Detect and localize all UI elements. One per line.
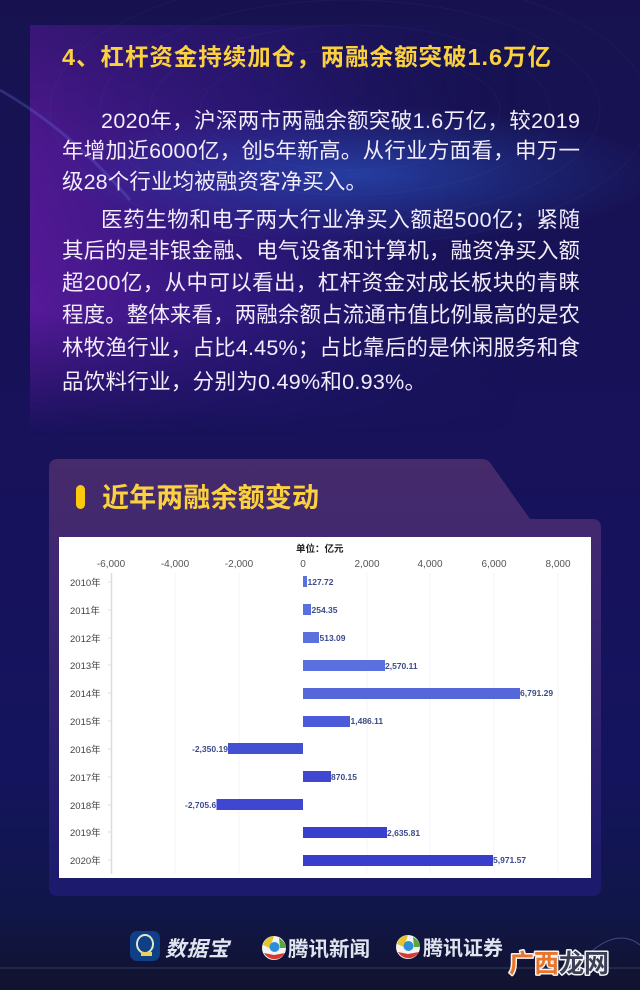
watermark: 广西 xyxy=(509,950,559,978)
y axis labels: 2010年 xyxy=(70,577,101,589)
chart unit: 单位：亿元 xyxy=(296,543,344,555)
y axis labels: 2020年 xyxy=(70,855,101,867)
panel background tab xyxy=(49,459,601,896)
text block: paragraph two: 林牧渔行业，占比4.45%；占比靠后的是休闲服务和食 xyxy=(62,336,580,360)
logo: 数据宝: 数据宝 xyxy=(165,937,232,961)
data labels: 2,635.81 xyxy=(387,828,420,838)
y axis labels: 2012年 xyxy=(70,633,101,645)
panel: chart section xyxy=(49,459,601,896)
x axis labels xyxy=(97,559,571,570)
data labels: -2,705.6 xyxy=(185,800,216,810)
x axis labels: 6,000 xyxy=(481,559,507,570)
y axis labels: 2018年 xyxy=(70,800,101,812)
chart heading: 近年两融余额变动 xyxy=(102,483,319,513)
data labels: 870.15 xyxy=(331,772,357,782)
x axis labels: 0 xyxy=(300,559,306,570)
y axis labels: 2016年 xyxy=(70,744,101,756)
text block: paragraph two: 程度。整体来看，两融余额占流通市值比例最高的是农 xyxy=(62,303,580,327)
x axis labels: 8,000 xyxy=(545,559,571,570)
logo: 腾讯证券 xyxy=(396,935,503,960)
y axis labels xyxy=(70,577,101,867)
logo: 腾讯新闻 xyxy=(262,936,370,961)
text block: paragraph two: 其后的是非银金融、电气设备和计算机，融资净买入额 xyxy=(62,239,580,263)
data labels: 127.72 xyxy=(308,577,334,587)
icon: 数据宝 badge xyxy=(130,931,160,961)
title: 4、杠杆资金持续加仓，两融余额突破1.6万亿 xyxy=(62,43,551,70)
text block: paragraph one: 2020年，沪深两市两融余额突破1.6万亿，较2019 xyxy=(101,109,580,133)
bars xyxy=(216,576,520,866)
logo: 数据宝 xyxy=(130,931,232,961)
text block: paragraph two: 医药生物和电子两大行业净买入额超500亿；紧随 xyxy=(101,208,580,232)
text block: paragraph two: 超200亿，从中可以看出，杠杆资金对成长板块的青睐 xyxy=(62,271,580,295)
data labels: 6,791.29 xyxy=(520,688,553,698)
icon: 腾讯 swirl xyxy=(396,935,420,959)
data labels xyxy=(185,577,553,865)
x axis labels: -4,000 xyxy=(161,559,190,570)
y axis labels: 2011年 xyxy=(70,605,100,617)
data labels: 254.35 xyxy=(312,605,338,615)
x axis labels: -2,000 xyxy=(225,559,254,570)
x axis labels: -6,000 xyxy=(97,559,126,570)
bar chart xyxy=(59,537,591,878)
heading accent pill xyxy=(76,485,85,509)
text block: paragraph one: 级28个行业均被融资客净买入。 xyxy=(62,170,367,194)
data labels: 5,971.57 xyxy=(493,855,526,865)
data labels: 513.09 xyxy=(320,633,346,643)
y axis labels: 2015年 xyxy=(70,716,101,728)
y axis labels: 2019年 xyxy=(70,827,101,839)
text block: paragraph one: 年增加近6000亿，创5年新高。从行业方面看，申万一 xyxy=(62,139,580,163)
text block: paragraph two: 品饮料行业，分别为0.49%和0.93%。 xyxy=(62,370,426,394)
icon: 腾讯 swirl xyxy=(262,936,286,960)
y axis labels: 2014年 xyxy=(70,688,101,700)
x axis labels: 2,000 xyxy=(354,559,380,570)
y axis labels: 2013年 xyxy=(70,660,101,672)
x axis labels: 4,000 xyxy=(417,559,443,570)
watermark xyxy=(509,950,609,978)
data labels: 1,486.11 xyxy=(350,716,383,726)
logo: 腾讯证券: 腾讯证券 xyxy=(423,937,503,960)
logo: 腾讯新闻: 腾讯新闻 xyxy=(288,937,370,961)
text block: paragraph one xyxy=(62,109,580,194)
y axis labels: 2017年 xyxy=(70,772,101,784)
data labels: -2,350.19 xyxy=(192,744,228,754)
watermark: 龙网 xyxy=(559,950,609,978)
text block: paragraph two xyxy=(62,208,580,394)
data labels: 2,570.11 xyxy=(385,661,418,671)
